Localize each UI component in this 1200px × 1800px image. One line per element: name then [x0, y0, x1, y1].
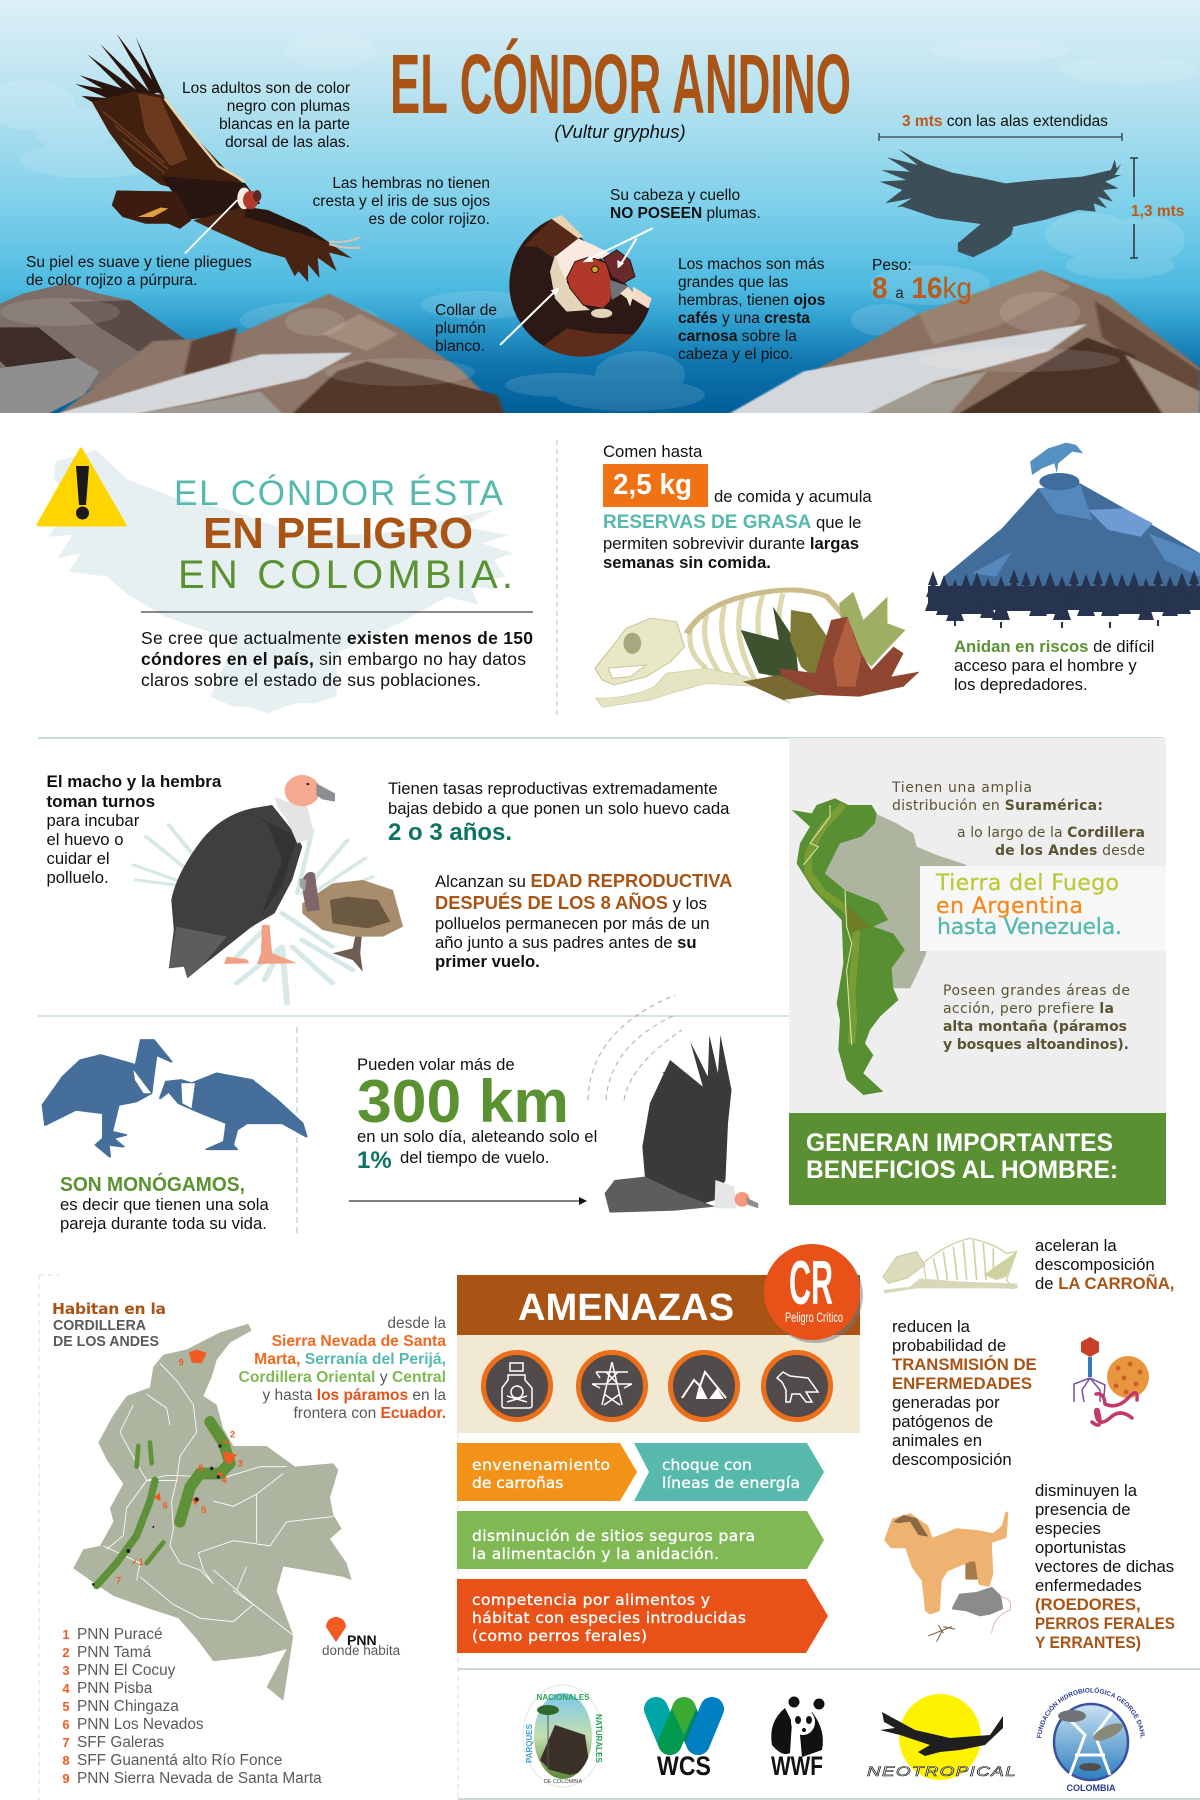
legend: protected areas: PNN Tamá: [77, 1644, 152, 1661]
condor silhouette: [879, 149, 1121, 257]
threat: poisoning: envenenamiento: [472, 1456, 610, 1474]
threat: competition: (como perros ferales): [472, 1627, 647, 1645]
text: nesting: [954, 637, 1154, 694]
legend: protected areas: PNN Los Nevados: [77, 1716, 204, 1733]
text: opportunists: (ROEDORES,: [1035, 1595, 1141, 1614]
text: head: NO POSEEN plumas.: [610, 205, 761, 222]
weight: Peso:: [872, 257, 912, 274]
text: range: Tienen una amplia: [891, 780, 1032, 796]
text: reproductive age: año junto a sus padres antes de su: [435, 933, 697, 952]
section: in danger: [38, 449, 533, 713]
text: males: [678, 256, 825, 363]
map: Colombia: 1: [138, 1557, 144, 1568]
text: habitat range: alta montaña (páramos: [943, 1019, 1127, 1035]
weight: [872, 257, 972, 305]
text: nesting: acceso para el hombre y: [954, 656, 1137, 675]
text: colombian range: [238, 1315, 446, 1422]
text: incubation: El macho y la hembra: [46, 772, 222, 791]
legend: protected areas: 6: [62, 1717, 70, 1732]
text: males: Los machos son más: [678, 256, 825, 273]
text: range: distribución en Suramérica:: [892, 798, 1103, 814]
text: disease: probabilidad de: [892, 1336, 1006, 1355]
text: Tierra del Fuego: en Argentina: [936, 894, 1083, 919]
icon: mountains: [670, 1352, 738, 1420]
text: flight distance: Pueden volar más de: [357, 1055, 515, 1074]
map: Colombia: [73, 1324, 352, 1701]
text: opportunists: Y ERRANTES): [1035, 1633, 1141, 1652]
legend: protected areas: PNN Pisba: [77, 1680, 153, 1697]
text: flight distance: 300 km: [357, 1068, 569, 1135]
threat: competition: competencia por alimentos y: [472, 1591, 710, 1609]
threat: poisoning: de carroñas: [472, 1474, 563, 1492]
text: adult colour: Los adultos son de color: [182, 80, 350, 97]
logo: WWF: WWF: [771, 1751, 823, 1781]
legend: protected areas: 1: [62, 1627, 70, 1642]
text: collar: blanco.: [435, 338, 485, 355]
text: monogamous: [60, 1172, 269, 1233]
text: disease: generadas por: [892, 1393, 1000, 1412]
text: food: semanas sin comida.: [603, 553, 771, 572]
heading: danger: EL CÓNDOR ÉSTA: [174, 474, 504, 513]
text: males: grandes que las: [678, 274, 789, 291]
text: flight distance: 1%: [357, 1147, 392, 1174]
text: incubation: [46, 772, 222, 887]
mountains: center: [54, 294, 505, 415]
text: males: carnosa sobre la: [678, 328, 797, 345]
text: population: [141, 628, 533, 690]
text: reproductive age: polluelos permanecen por más de un: [435, 914, 710, 933]
text: food: de comida y acumula: [714, 487, 872, 506]
text: disease: ENFERMEDADES: [892, 1374, 1032, 1393]
threat: habitat loss: [457, 1511, 824, 1569]
heading: danger: EN COLOMBIA.: [178, 553, 513, 597]
logo: Fundación George Dahl: COLOMBIA: [1066, 1783, 1116, 1793]
heading: habitat: [52, 1300, 166, 1350]
mountains: right: [727, 270, 1200, 415]
mountains: left: [0, 284, 187, 415]
text: skin: [26, 254, 252, 289]
text: females: [313, 175, 490, 228]
text: opportunists: especies: [1035, 1519, 1101, 1538]
logo: Parques Nacionales: NATURALES: [594, 1714, 603, 1763]
text: reproductive age: primer vuelo.: [435, 952, 540, 971]
text: reproduction rate: Tienen tasas reproductivas extremadamente: [388, 779, 718, 798]
text: disease: reducen la: [892, 1317, 971, 1336]
badge: critically endangered: Peligro Crítico: [785, 1309, 843, 1325]
text: range: [891, 780, 1145, 859]
map: Colombia: 6: [163, 1501, 168, 1512]
badge: critically endangered: [764, 1244, 863, 1343]
heading: danger: [174, 474, 513, 597]
text: colombian range: desde la: [387, 1315, 446, 1332]
heading: amenazas: AMENAZAS: [518, 1287, 734, 1329]
panel: benefits heading: BENEFICIOS AL HOMBRE:: [806, 1156, 1118, 1184]
illustration: dog, rat and mosquito: [886, 1513, 1011, 1642]
map: Colombia: 3: [238, 1459, 243, 1470]
legend: PNN pin: donde habita: [322, 1643, 401, 1658]
text: disease: animales en: [892, 1431, 982, 1450]
icon: poison: [484, 1352, 550, 1420]
logo: Parques Nacionales: DE COLOMBIA: [544, 1779, 582, 1785]
threat: habitat loss: la alimentación y la anidación.: [472, 1545, 719, 1563]
text: reproductive age: [435, 870, 732, 971]
text: colombian range: frontera con Ecuador.: [294, 1405, 446, 1422]
text: food: RESERVAS DE GRASA que le: [603, 512, 861, 533]
map: Colombia: 7: [116, 1576, 121, 1587]
threat: habitat loss: disminución de sitios seguros para: [472, 1527, 755, 1545]
scientific name: (Vultur gryphus): [554, 121, 686, 142]
icon: warning triangle: [38, 449, 125, 525]
text: opportunists: PERROS FERALES: [1035, 1614, 1175, 1633]
illustration: chick: [300, 872, 403, 972]
panel: partner logos: [458, 1668, 1200, 1800]
text: opportunists: enfermedades: [1035, 1576, 1142, 1595]
height measure: 1,3 mts: [1131, 203, 1184, 220]
text: food: [603, 442, 872, 572]
text: reproduction rate: bajas debido a que ponen un solo huevo cada: [388, 799, 730, 818]
text: habitat range: y bosques altoandinos).: [943, 1037, 1129, 1053]
map: South America: [792, 798, 967, 1095]
wingspan measure: [879, 113, 1122, 141]
heading: danger: EN PELIGRO: [203, 509, 473, 558]
text: incubation: el huevo o: [46, 830, 124, 849]
text: head: [610, 187, 761, 222]
text: colombian range: Sierra Nevada de Santa: [272, 1333, 446, 1350]
text: carrion: [1035, 1236, 1174, 1293]
text: Tierra del Fuego: [935, 871, 1122, 940]
text: Tierra del Fuego: hasta Venezuela.: [937, 915, 1122, 940]
illustration: small skeleton: [883, 1238, 1018, 1293]
threat: power lines: [634, 1443, 824, 1501]
legend: PNN pin: [322, 1617, 401, 1658]
icon: pathogens: [1074, 1337, 1149, 1425]
text: opportunists: [1035, 1481, 1175, 1652]
hero sky panel: [0, 0, 1200, 415]
text: habitat range: [943, 983, 1130, 1053]
text: skin: de color rojizo a púrpura.: [26, 272, 197, 289]
text: females: cresta y el iris de sus ojos: [313, 193, 490, 210]
text: opportunists: presencia de: [1035, 1500, 1131, 1519]
legend: protected areas: 9: [62, 1771, 70, 1786]
threat: competition: [457, 1579, 828, 1653]
text: males: cabeza y el pico.: [678, 346, 793, 363]
text: disease: patógenos de: [892, 1412, 993, 1431]
legend: protected areas: PNN Chingaza: [77, 1698, 179, 1715]
text: flight distance: del tiempo de vuelo.: [400, 1148, 549, 1167]
logo: Fundación George Dahl: FUNDACIÓN HIDROBIOLÓGICA GEORGE DAHL: [1036, 1687, 1145, 1738]
text: colombian range: Marta, Serranía del Perijá,: [254, 1351, 446, 1368]
text: adult colour: negro con plumas: [227, 98, 350, 115]
text: collar: plumón: [435, 320, 486, 337]
height measure: [1130, 158, 1184, 258]
text: reproductive age: DESPUÉS DE LOS 8 AÑOS y los: [435, 892, 707, 913]
threat: power lines: choque con: [662, 1456, 752, 1474]
text: monogamous: SON MONÓGAMOS,: [60, 1172, 245, 1196]
wingspan measure: 3 mts con las alas extendidas: [902, 113, 1108, 130]
logo: Neotropical: [867, 1694, 1017, 1780]
callout: 2,5 kg: 2,5 kg: [613, 469, 692, 501]
logo: Parques Nacionales: NACIONALES: [537, 1693, 590, 1702]
legend: protected areas: 2: [62, 1645, 70, 1660]
logo: Fundación George Dahl: [1036, 1687, 1145, 1793]
threat: competition: hábitat con especies introducidas: [472, 1609, 746, 1627]
text: males: hembras, tienen ojos: [678, 292, 825, 309]
logo: WCS: WCS: [657, 1751, 711, 1781]
panel: benefits heading: GENERAN IMPORTANTES: [806, 1129, 1113, 1157]
text: population: claros sobre el estado de sus poblaciones.: [141, 670, 481, 690]
text: head: Su cabeza y cuello: [610, 187, 740, 204]
text: habitat range: acción, pero prefiere la: [943, 1001, 1114, 1017]
text: range: a lo largo de la Cordillera: [957, 825, 1145, 841]
panel: distribution in South America: [789, 738, 1166, 1113]
text: food: permiten sobrevivir durante largas: [603, 534, 859, 553]
head detail inset: [500, 215, 653, 357]
logo: Parques Nacionales: [523, 1685, 603, 1787]
text: carrion: de LA CARROÑA,: [1035, 1273, 1174, 1293]
illustration: flapping condor: [605, 1035, 758, 1213]
text: carrion: descomposición: [1035, 1255, 1155, 1274]
legend: protected areas: 5: [62, 1699, 70, 1714]
text: nesting: Anidan en riscos de difícil: [954, 637, 1154, 656]
text: colombian range: Cordillera Oriental y Central: [238, 1369, 446, 1386]
legend: protected areas: 7: [62, 1735, 70, 1750]
text: disease: descomposición: [892, 1450, 1012, 1469]
map: Colombia: 8: [198, 1463, 204, 1474]
text: colombian range: y hasta los páramos en la: [262, 1387, 446, 1404]
text: incubation: polluelo.: [46, 868, 109, 887]
weight: 8 a 16kg: [872, 272, 972, 305]
text: adult colour: dorsal de las alas.: [225, 134, 350, 151]
text: reproductive age: Alcanzan su EDAD REPRODUCTIVA: [435, 870, 732, 891]
legend: protected areas: 3: [62, 1663, 70, 1678]
text: Tierra del Fuego: Tierra del Fuego: [935, 871, 1119, 896]
legend: protected areas: SFF Guanentá alto Río Fonce: [77, 1752, 282, 1769]
text: males: cafés y una cresta: [678, 310, 810, 327]
text: opportunists: oportunistas: [1035, 1538, 1126, 1557]
legend: protected areas: SFF Galeras: [77, 1734, 165, 1751]
arrow: to skin folds: [185, 200, 237, 254]
legend: protected areas: 4: [62, 1681, 70, 1696]
logo: Neotropical: NEOTROPICAL: [867, 1763, 1017, 1779]
text: reproduction rate: [388, 779, 730, 846]
text: habitat range: Poseen grandes áreas de: [943, 983, 1130, 999]
map: Colombia: 9: [179, 1358, 184, 1369]
pale condor silhouette: [48, 450, 513, 713]
text: disease: [892, 1317, 1037, 1469]
text: population: Se cree que actualmente existen menos de 150: [141, 628, 533, 648]
text: population: cóndores en el país, sin embargo no hay datos: [141, 649, 526, 669]
heading: habitat: DE LOS ANDES: [53, 1333, 159, 1350]
logo: Parques Nacionales: PARQUES: [525, 1723, 534, 1763]
text: females: Las hembras no tienen: [332, 175, 490, 192]
legend: protected areas: 8: [62, 1753, 70, 1768]
icon: wolf: [764, 1352, 830, 1420]
heading: habitat: Habitan en la: [52, 1300, 166, 1318]
text: reproduction rate: 2 o 3 años.: [388, 819, 512, 846]
condor in flight illustration: [75, 34, 361, 282]
text: opportunists: disminuyen la: [1035, 1481, 1138, 1500]
text: food: Comen hasta: [603, 442, 703, 461]
arrow: flight direction: [349, 1197, 587, 1205]
panel: benefits heading: [789, 1113, 1166, 1205]
logo: WWF: [771, 1696, 824, 1781]
text: flight distance: en un solo día, aleteando solo el: [357, 1127, 597, 1146]
text: flight distance: [357, 1055, 597, 1174]
icon: power tower: [578, 1352, 646, 1420]
illustration: adult condor: [169, 775, 335, 978]
legend: protected areas: PNN Puracé: [77, 1626, 163, 1643]
panel: threats: [457, 1244, 863, 1433]
legend: protected areas: PNN El Cocuy: [77, 1662, 176, 1679]
illustration: mountain with nest: [932, 443, 1200, 607]
text: monogamous: pareja durante toda su vida.: [60, 1214, 267, 1233]
legend: protected areas: [62, 1626, 322, 1787]
text: females: es de color rojizo.: [369, 211, 490, 228]
text: monogamous: es decir que tienen una sola: [60, 1195, 269, 1214]
text: carrion: aceleran la: [1035, 1236, 1117, 1255]
text: disease: TRANSMISIÓN DE: [892, 1355, 1037, 1374]
text: nesting: los depredadores.: [954, 675, 1088, 694]
map: Colombia: 4: [222, 1475, 228, 1486]
text: incubation: para incubar: [46, 811, 140, 830]
map: Colombia: 2: [230, 1429, 235, 1440]
badge: critically endangered: CR: [789, 1249, 833, 1318]
legend: protected areas: PNN Sierra Nevada de Santa Marta: [77, 1770, 322, 1787]
illustration: condor pair silhouettes: [43, 1040, 306, 1157]
text: incubation: cuidar el: [46, 849, 110, 868]
threat: power lines: líneas de energía: [662, 1474, 800, 1492]
text: incubation: toman turnos: [46, 792, 155, 811]
text: opportunists: vectores de dichas: [1035, 1557, 1174, 1576]
text: skin: Su piel es suave y tiene pliegues: [26, 254, 252, 271]
legend: PNN pin: PNN: [347, 1632, 377, 1648]
text: adult colour: blancas en la parte: [219, 116, 350, 133]
icon: perched condor: [1030, 443, 1083, 475]
text: collar: Collar de: [435, 302, 497, 319]
heading: habitat: CORDILLERA: [53, 1317, 146, 1334]
text: range: de los Andes desde: [995, 843, 1145, 859]
illustration: skeleton with leaves: [595, 590, 920, 707]
illustration: forest: [925, 569, 1200, 628]
arrows to collar and head: [500, 228, 653, 345]
logo: WCS: [656, 1697, 712, 1781]
callout: 2,5 kg: [603, 464, 708, 507]
text: adult colour: [182, 80, 350, 151]
illustration: plant behind condor: [134, 825, 373, 1003]
map: Colombia: 5: [201, 1505, 206, 1516]
text: collar: [435, 302, 497, 355]
threat: poisoning: [457, 1443, 637, 1501]
